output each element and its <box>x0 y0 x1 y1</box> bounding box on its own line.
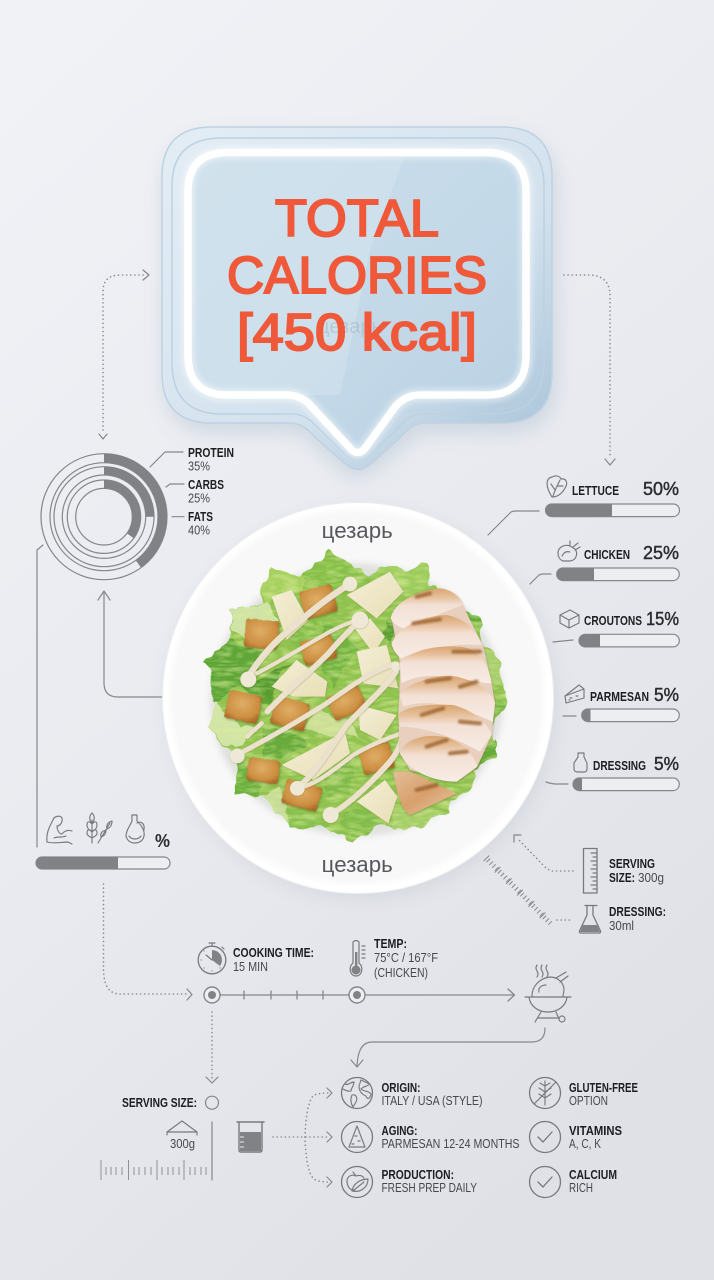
serving size block: 300g <box>170 1136 195 1151</box>
icon: ruler <box>584 848 597 893</box>
progress bar <box>557 568 679 581</box>
plate <box>162 502 556 898</box>
ingredient: lettuce: LETTUCE <box>572 483 619 498</box>
aging: PARMESAN 12-24 MONTHS <box>382 1136 520 1151</box>
left vertical line <box>37 545 43 847</box>
aging <box>342 1122 520 1152</box>
macro labels <box>188 445 234 538</box>
dressing amount info: 30ml <box>609 918 634 933</box>
macro labels: FATS <box>188 509 213 524</box>
arrow: bar to timeline <box>104 884 192 1000</box>
scale ruler <box>101 1160 206 1180</box>
ingredient: lettuce <box>488 476 680 535</box>
ingredient: dressing: 5% <box>654 753 679 774</box>
icon: globe <box>342 1078 372 1108</box>
icon: grill with chicken <box>525 965 571 1022</box>
progress bar <box>546 504 680 517</box>
serving size info: SERVING <box>609 856 655 871</box>
icon: check <box>530 1166 560 1198</box>
temperature: 75°C / 167°F <box>374 950 438 965</box>
icon: scale <box>167 1121 197 1135</box>
salad shadow <box>210 563 503 837</box>
origin: ITALY / USA (STYLE) <box>382 1093 482 1108</box>
macro rings chart <box>41 454 167 580</box>
arrow: timeline to serving size <box>206 1012 218 1083</box>
ingredient: parmesan: 5% <box>654 684 679 705</box>
serving size info: 300g <box>638 870 664 885</box>
serving size info <box>584 848 664 893</box>
origin: ORIGIN: <box>382 1080 420 1095</box>
gluten free <box>530 1078 638 1108</box>
progress bar <box>579 634 679 647</box>
croutons <box>224 584 395 812</box>
icon: cheese <box>565 685 584 703</box>
title: total calories: CALORIES <box>227 247 487 305</box>
ingredient: chicken: 25% <box>643 542 679 563</box>
cooking time <box>198 943 314 974</box>
ingredient: croutons: 15% <box>646 608 679 629</box>
title: total calories: [450 kcal] <box>237 304 477 362</box>
macro labels: 35% <box>188 458 210 474</box>
icon: thermometer <box>350 940 365 976</box>
ingredient: chicken <box>530 541 679 584</box>
icon: chicken <box>558 541 580 561</box>
ingredient: croutons <box>553 608 679 647</box>
icon: dressing bottle <box>574 753 587 772</box>
macro labels: PROTEIN <box>188 445 234 460</box>
gluten free: GLUTEN-FREE <box>569 1080 638 1095</box>
calcium: CALCIUM <box>569 1167 617 1182</box>
arrow: dotted right down <box>564 275 615 465</box>
percent sign: % <box>155 831 170 851</box>
arrow: serving to plate <box>514 835 573 871</box>
ingredient: parmesan <box>563 684 679 722</box>
protein arc 35% <box>104 484 137 536</box>
ingredient: chicken: CHICKEN <box>584 547 630 562</box>
dressing amount info: DRESSING: <box>609 904 666 919</box>
salad illustration <box>203 550 507 842</box>
vitamins <box>530 1122 622 1152</box>
temperature: (CHICKEN) <box>374 965 428 980</box>
timeline node 2 <box>349 987 365 1003</box>
icon: flask <box>579 906 601 933</box>
ingredient: croutons: CROUTONS <box>584 613 642 628</box>
serving size block: SERVING SIZE: <box>122 1095 197 1110</box>
icon: muscle <box>47 816 72 844</box>
plate label top: цезарь <box>322 518 393 543</box>
macro labels: CARBS <box>188 477 224 492</box>
calcium: RICH <box>569 1180 593 1195</box>
calcium <box>530 1166 617 1198</box>
carbs arc 25% <box>104 471 150 517</box>
ingredient: lettuce: 50% <box>643 478 679 499</box>
icon: crossed wheat <box>530 1078 560 1108</box>
serving size info: SIZE: <box>609 870 635 885</box>
ingredient: dressing: DRESSING <box>593 758 646 773</box>
serving size block <box>101 1095 218 1180</box>
arrow: grill to info <box>351 1028 545 1067</box>
temperature: TEMP: <box>374 936 407 951</box>
ingredient: dressing <box>546 753 679 791</box>
icon: apple and leaf <box>342 1166 372 1198</box>
title: total calories <box>227 190 487 362</box>
macro labels: 40% <box>188 522 210 538</box>
grilled chicken slices <box>391 588 495 815</box>
dressing amount info <box>579 904 666 933</box>
progress bar <box>36 857 170 869</box>
production <box>342 1166 477 1198</box>
icon: oil bottle <box>126 815 144 843</box>
production: PRODUCTION: <box>382 1167 454 1182</box>
parmesan shavings <box>272 572 403 823</box>
arrow: dotted left up <box>99 270 149 439</box>
production: FRESH PREP DAILY <box>382 1180 477 1195</box>
macro icons row <box>36 813 170 869</box>
timeline <box>204 987 514 1003</box>
progress bar <box>582 709 679 722</box>
icon: check <box>530 1122 560 1152</box>
grill marks <box>413 593 480 790</box>
icon: wheat <box>87 813 112 843</box>
title: total calories: TOTAL <box>275 190 439 248</box>
vitamins: VITAMINS <box>569 1123 622 1138</box>
branching dotted arrows <box>273 1088 332 1187</box>
aging: AGING: <box>382 1123 418 1138</box>
cooking time: COOKING TIME: <box>233 945 314 960</box>
dressing <box>230 577 408 823</box>
icon: stopwatch <box>198 943 226 974</box>
arrow: plate to rings <box>98 591 162 697</box>
icon: lettuce <box>547 476 567 497</box>
fats arc 40% <box>104 458 162 564</box>
icon: cheese wedge <box>342 1122 372 1152</box>
plate label bottom: цезарь <box>322 852 393 877</box>
cooking time: 15 MIN <box>233 959 268 974</box>
origin <box>342 1078 482 1108</box>
macro labels: 25% <box>188 490 210 506</box>
icon: crouton <box>560 610 579 628</box>
watermark: цезарь <box>318 316 382 338</box>
icon: beaker <box>237 1122 264 1152</box>
speech bubble: total calories <box>162 127 556 477</box>
diagonal ruler <box>486 858 552 925</box>
timeline node 1 <box>204 987 220 1003</box>
vitamins: A, C, K <box>569 1136 601 1151</box>
gluten free: OPTION <box>569 1093 608 1108</box>
progress bar <box>573 778 679 791</box>
lettuce <box>203 550 507 842</box>
ring connectors <box>150 452 184 517</box>
temperature <box>350 936 438 980</box>
ingredient: parmesan: PARMESAN <box>590 689 649 704</box>
